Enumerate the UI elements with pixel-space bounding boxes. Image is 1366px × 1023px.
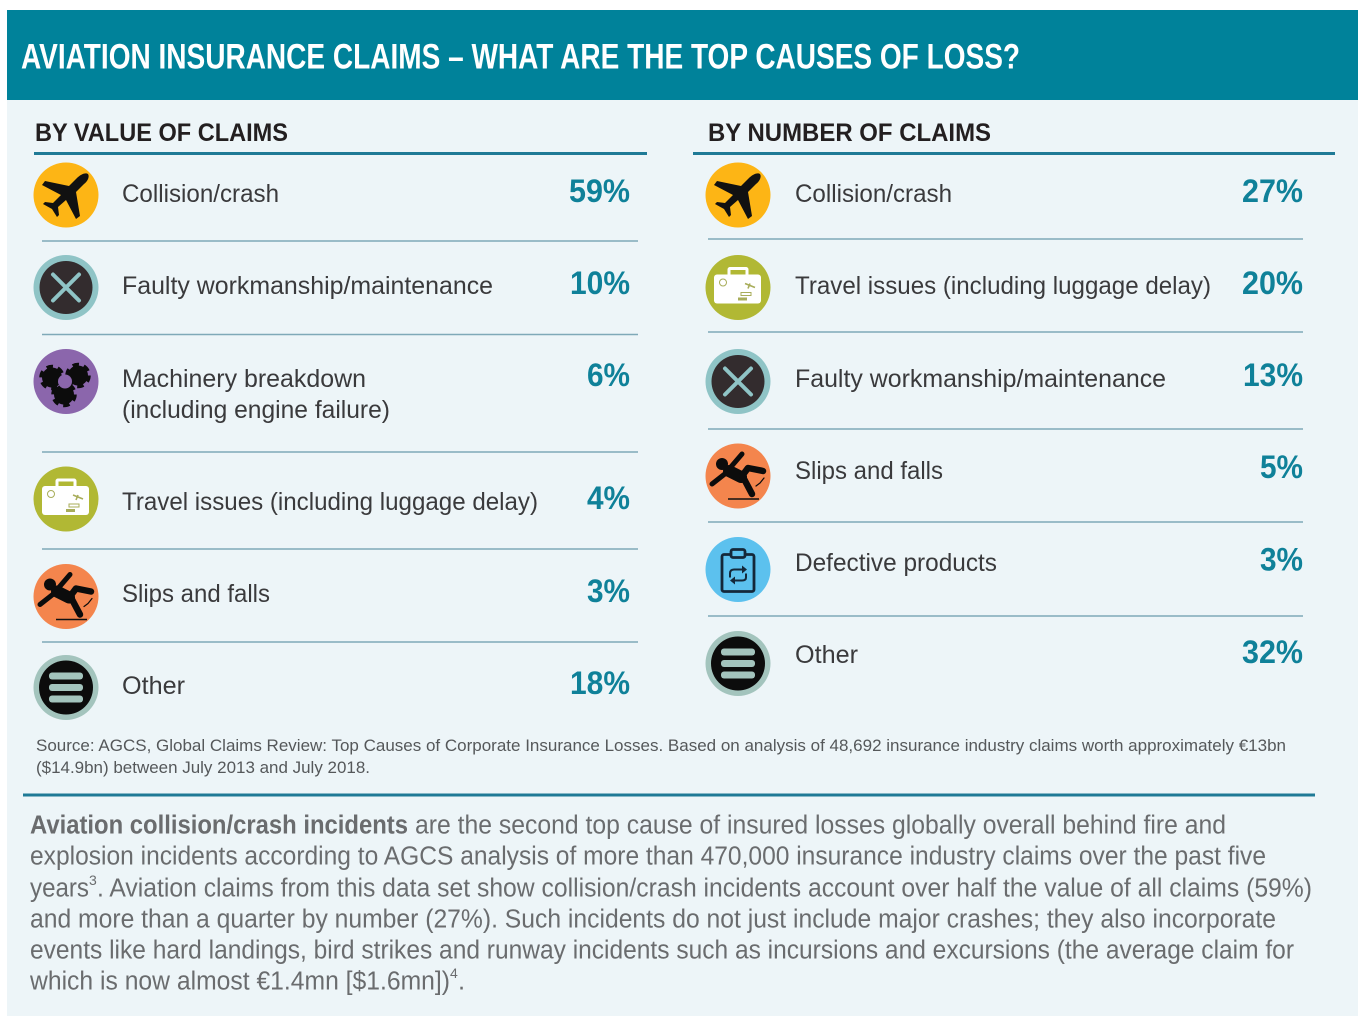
title banner: AVIATION INSURANCE CLAIMS – WHAT ARE THE TOP CAUSES OF LOSS? (21, 38, 1020, 76)
row: faulty workmanship/maintenance 10%: 10% (570, 265, 630, 301)
body paragraph: 3 (89, 872, 97, 888)
row: machinery breakdown 6%: 6% (587, 357, 630, 393)
source note: ($14.9bn) between July 2013 and July 2018. (36, 758, 370, 777)
row: other 32%: Other (795, 641, 858, 669)
row: slips and falls 3%: 3% (587, 573, 630, 609)
row: collision/crash 27% (706, 162, 1303, 228)
row: other 18% (34, 655, 630, 720)
row: collision/crash 27%: Collision/crash (795, 180, 952, 208)
row: travel issues 4%: 4% (587, 480, 630, 516)
body paragraph: are the second top cause of insured losses globally overall behind fire and (415, 812, 1226, 840)
row: faulty workmanship/maintenance 13%: 13% (1243, 357, 1303, 393)
row: travel issues 20%: Travel issues (including luggage delay) (795, 272, 1211, 300)
title banner (7, 10, 1358, 100)
row: slips and falls 5%: Slips and falls (795, 457, 943, 485)
panel: by number of claims (693, 119, 1335, 696)
body paragraph: explosion incidents according to AGCS analysis of more than 470,000 insurance industry claims over the past five (30, 842, 1266, 870)
row: other 32% (706, 631, 1303, 696)
body paragraph: . (458, 968, 465, 996)
row: collision/crash 59% (34, 162, 630, 228)
row: collision/crash 59%: Collision/crash (122, 180, 279, 208)
heading: by number of claims: BY NUMBER OF CLAIMS (708, 119, 991, 147)
row: other 18%: Other (122, 672, 185, 700)
row: faulty workmanship/maintenance 10%: Faulty workmanship/maintenance (122, 272, 493, 300)
body paragraph: and more than a quarter by number (27%). Such incidents do not just include major crashes; they also incorporate (30, 906, 1276, 934)
row: defective products 3% (706, 537, 1303, 602)
body paragraph: 4 (450, 965, 458, 981)
row: defective products 3%: Defective products (795, 549, 997, 577)
row: collision/crash 27%: 27% (1242, 173, 1303, 209)
row: faulty workmanship/maintenance 13%: Faulty workmanship/maintenance (795, 365, 1166, 393)
row: travel issues 4% (34, 466, 630, 532)
source note: Source: AGCS, Global Claims Review: Top Causes of Corporate Insurance Losses. Based on analysis of 48,692 insurance industry claims worth approximately €13bn (36, 736, 1286, 755)
row: slips and falls 5%: 5% (1260, 449, 1303, 485)
row: faulty workmanship/maintenance 13% (706, 349, 1303, 414)
row: collision/crash 59%: 59% (569, 173, 630, 209)
body paragraph: events like hard landings, bird strikes and runway incidents such as incursions and excursions (the average claim for (30, 936, 1294, 964)
body paragraph: Aviation collision/crash incidents (30, 812, 408, 840)
row: machinery breakdown 6%: Machinery breakdown (122, 365, 366, 393)
row: slips and falls 5% (706, 444, 1303, 508)
body paragraph: . Aviation claims from this data set show collision/crash incidents account over half the value of all claims (59%) (97, 874, 1312, 902)
body paragraph (29, 812, 1312, 996)
row: faulty workmanship/maintenance 10% (34, 255, 630, 320)
row: travel issues 4%: Travel issues (including luggage delay) (122, 488, 538, 516)
row: defective products 3%: 3% (1260, 542, 1303, 578)
body paragraph: which is now almost €1.4mn [$1.6mn]) (29, 968, 450, 996)
row: slips and falls 3% (34, 564, 630, 629)
source note (36, 736, 1286, 777)
row: slips and falls 3%: Slips and falls (122, 580, 270, 608)
row: travel issues 20% (706, 255, 1303, 320)
panel: by value of claims (34, 119, 647, 720)
body paragraph: years (30, 874, 89, 902)
row: machinery breakdown 6% (34, 349, 630, 424)
row: machinery breakdown 6%: (including engine failure) (122, 396, 390, 424)
row: other 18%: 18% (570, 665, 630, 701)
row: other 32%: 32% (1242, 634, 1303, 670)
heading: by value of claims: BY VALUE OF CLAIMS (35, 119, 288, 147)
row: travel issues 20%: 20% (1242, 265, 1303, 301)
